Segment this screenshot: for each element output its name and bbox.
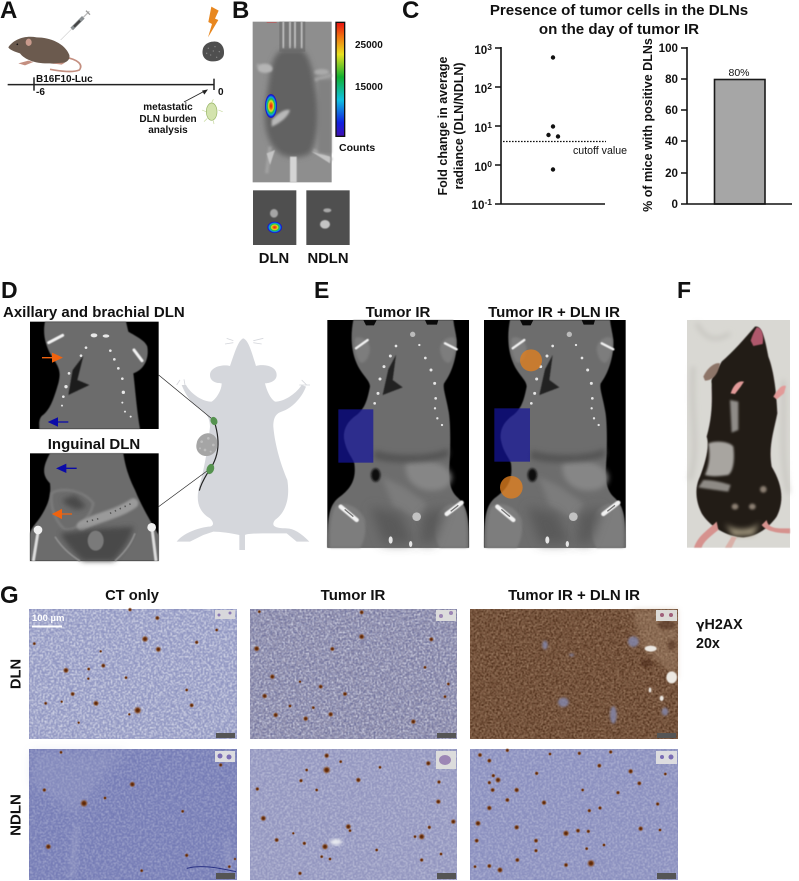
icon: tumor xyxy=(202,42,224,61)
panel F: photo of irradiated mouse xyxy=(677,277,790,548)
bar chart: 40 xyxy=(665,135,678,148)
schematic: mouse silhouette with tumor and DLNs xyxy=(159,338,310,550)
row label: DLN: DLN xyxy=(8,659,24,689)
bar chart: 80% xyxy=(728,67,750,79)
CT: tumor IR xyxy=(327,320,469,548)
arrow: blue xyxy=(58,465,77,472)
field: inguinal DLN xyxy=(500,476,523,499)
color scale bar xyxy=(336,22,345,136)
icon: mouse xyxy=(8,37,81,71)
column heading: Tumor IR: Tumor IR xyxy=(321,587,386,604)
CT: inguinal xyxy=(30,453,159,561)
panel B: bioluminescence imaging xyxy=(232,0,383,267)
heading Tumor IR + DLN IR: Tumor IR + DLN IR xyxy=(488,304,620,321)
label F: F xyxy=(677,277,691,303)
image labels: DLN xyxy=(259,251,289,267)
dot plot: 2 xyxy=(487,81,492,91)
field: tumor xyxy=(338,409,373,463)
image: NDLN xyxy=(306,190,350,245)
image labels xyxy=(259,251,349,267)
dot plot: 1 xyxy=(487,120,492,130)
icon: syringe xyxy=(61,11,90,40)
dot plot: 10 xyxy=(472,199,484,212)
dot plot: 10 xyxy=(474,122,487,135)
timeline labels xyxy=(36,74,224,136)
histology: Tumor IR DLN xyxy=(250,609,457,739)
dot plot: 10 xyxy=(474,161,487,174)
dot plot: 3 xyxy=(487,42,492,52)
column heading: Tumor IR + DLN IR: Tumor IR + DLN IR xyxy=(508,587,640,604)
timeline labels: metastatic xyxy=(143,102,193,113)
histology: Tumor IR NDLN xyxy=(250,749,457,880)
bar chart: % of mice with positive DLNs xyxy=(641,38,655,212)
panel E: irradiation fields xyxy=(314,277,626,548)
scale labels xyxy=(339,40,383,154)
arrow: blue xyxy=(49,418,68,426)
histology: CT only NDLN xyxy=(29,749,237,880)
dot plot: radiance (DLN/NDLN) xyxy=(452,62,466,190)
field: tumor xyxy=(494,408,530,462)
CT: tumor IR + DLN IR xyxy=(484,320,626,548)
dot plot: 10 xyxy=(474,83,487,96)
label D: D xyxy=(1,277,18,303)
bar chart: 0 xyxy=(672,198,678,211)
bar chart xyxy=(641,38,792,212)
timeline labels: B16F10-Luc xyxy=(36,74,93,85)
panel A: experimental timeline xyxy=(0,0,224,136)
dot plot: 10 xyxy=(474,44,487,57)
CT: axillary and brachial xyxy=(30,322,159,429)
chart title xyxy=(490,2,748,38)
histology: CT only DLN xyxy=(29,607,237,739)
arrow: orange xyxy=(42,354,61,362)
scale labels: Counts xyxy=(339,142,375,154)
heading inguinal: Inguinal DLN xyxy=(48,436,140,453)
scale labels: 15000 xyxy=(355,82,383,93)
timeline labels: -6 xyxy=(36,87,45,98)
chart title: on the day of tumor IR xyxy=(539,21,699,38)
stain label: 20x xyxy=(696,636,720,652)
label G: G xyxy=(0,582,19,609)
bar chart: 80 xyxy=(665,73,678,86)
timeline xyxy=(8,77,214,91)
panel D: CT and schematic xyxy=(1,277,310,561)
heading axillary: Axillary and brachial DLN xyxy=(3,304,185,321)
dot plot: -1 xyxy=(484,197,492,207)
histology: Tumor IR + DLN IR NDLN xyxy=(470,748,678,880)
chart title: Presence of tumor cells in the DLNs xyxy=(490,2,748,19)
image: DLN xyxy=(253,190,296,245)
bar chart: 60 xyxy=(665,104,678,117)
heading Tumor IR: Tumor IR xyxy=(366,304,431,321)
stain label: γH2AX xyxy=(696,617,743,633)
scale bar: 100 µm xyxy=(32,613,64,624)
arrow: orange xyxy=(53,510,72,518)
dot plot: Fold change in average xyxy=(436,56,450,195)
scale labels: 25000 xyxy=(355,40,383,51)
image labels: NDLN xyxy=(307,251,349,267)
timeline labels: DLN burden xyxy=(139,114,197,125)
dot plot: cutoff value xyxy=(573,145,627,157)
histology: Tumor IR + DLN IR DLN xyxy=(470,609,678,739)
timeline labels: 0 xyxy=(218,87,224,98)
dot plot xyxy=(436,42,627,212)
icon: lymph node xyxy=(202,99,223,124)
field: axillary DLN xyxy=(520,349,542,371)
panel G: gamma H2AX histology xyxy=(0,582,743,880)
timeline labels: analysis xyxy=(148,125,188,136)
stain label xyxy=(696,617,743,652)
image: whole mouse bioluminescence xyxy=(253,22,332,182)
column heading: CT only: CT only xyxy=(105,588,160,604)
icon: lightning bolt xyxy=(208,7,219,37)
panel C: tumor cells in the DLNs xyxy=(402,0,792,212)
bar chart: 100 xyxy=(659,42,678,55)
row label: NDLN: NDLN xyxy=(8,794,24,836)
dot plot: 0 xyxy=(487,159,492,169)
arrow xyxy=(184,91,204,102)
photo xyxy=(687,320,790,548)
bar chart: 20 xyxy=(665,167,678,180)
label E: E xyxy=(314,277,329,303)
